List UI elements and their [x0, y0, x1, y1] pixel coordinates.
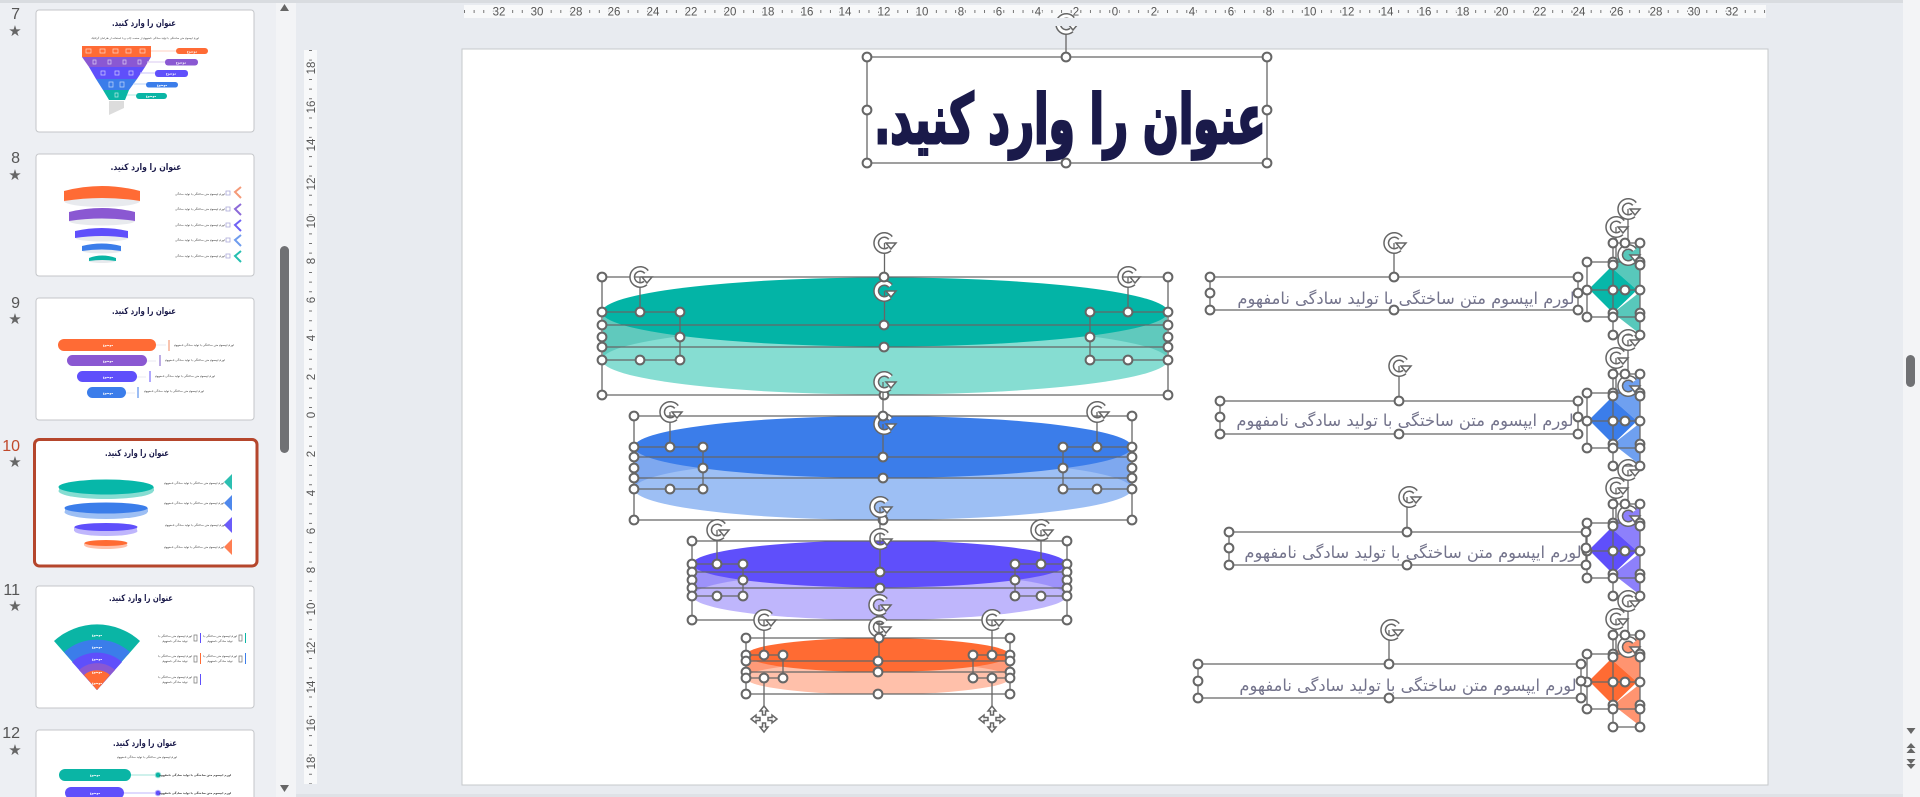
horizontal ruler: 10	[1304, 6, 1316, 18]
slide 8 thumbnail: ★	[8, 166, 22, 184]
slide 11 thumbnail: لورم ایپسوم متن ساختگی با	[158, 634, 192, 639]
slide 10 thumbnail (selected): لورم ایپسوم متن ساختگی با تولید سادگی نامفهوم	[165, 523, 225, 528]
row 2: text and diamond: لورم ایپسوم متن ساختگی با تولید سادگی نامفهوم	[1236, 411, 1574, 431]
slide 12 thumbnail: 12	[2, 725, 20, 742]
vertical ruler: 0	[306, 412, 318, 418]
row 2: text and diamond	[1216, 332, 1644, 470]
vertical ruler: 4	[306, 334, 318, 341]
slide 11 thumbnail: موضوع	[92, 645, 102, 649]
slide 11 thumbnail: لورم ایپسوم متن ساختگی با	[203, 634, 237, 639]
horizontal ruler: 14	[839, 6, 852, 18]
vertical ruler: 16	[306, 719, 318, 731]
vertical ruler: 2	[306, 451, 318, 457]
horizontal ruler: 12	[1342, 6, 1354, 18]
horizontal ruler: 2	[1151, 6, 1157, 18]
slide 10 thumbnail (selected)	[2, 438, 257, 566]
horizontal ruler: 30	[531, 6, 543, 18]
slide 10 thumbnail (selected): لورم ایپسوم متن ساختگی با تولید سادگی نامفهوم	[164, 481, 224, 486]
slide 11 thumbnail: موضوع	[92, 633, 102, 637]
slide 9 thumbnail: موضوع	[103, 359, 113, 363]
funnel layer: orange	[742, 597, 1014, 732]
slide 11 thumbnail: موضوع	[92, 657, 102, 661]
slide 10 thumbnail (selected): ★	[8, 453, 22, 471]
horizontal ruler: 26	[608, 6, 620, 18]
slide 11 thumbnail: تولید سادگی نامفهوم	[207, 639, 233, 644]
horizontal ruler: 22	[1534, 6, 1546, 18]
slide 7 thumbnail: موضوع	[146, 94, 156, 98]
slide 9 thumbnail	[8, 295, 254, 420]
horizontal ruler: 20	[1496, 6, 1508, 18]
slide 11 thumbnail: ★	[8, 597, 22, 615]
slide 11 thumbnail: تولید سادگی نامفهوم	[162, 680, 188, 685]
horizontal ruler: 28	[1650, 6, 1662, 18]
main scrollbar	[1903, 0, 1920, 797]
horizontal ruler: 18	[762, 6, 774, 18]
slide 7 thumbnail: موضوع	[166, 72, 176, 76]
row 3: text and diamond: لورم ایپسوم متن ساختگی با تولید سادگی نامفهوم	[1244, 543, 1582, 563]
horizontal ruler	[464, 5, 1766, 18]
horizontal ruler: 24	[647, 6, 660, 18]
vertical ruler: 6	[306, 297, 318, 303]
vertical ruler: 6	[306, 528, 318, 534]
vertical ruler: 12	[306, 178, 318, 190]
vertical ruler: 14	[306, 680, 318, 693]
title with selection box	[863, 16, 1271, 167]
row 1: text and diamond	[1206, 201, 1644, 339]
slide 12 thumbnail: لورم ایپسوم متن ساختگی با تولید سادگی نامفهوم	[117, 755, 177, 760]
slide 12 thumbnail: لورم ایپسوم متن ساختگی با تولید سادگی نامفهوم	[159, 791, 231, 795]
vertical ruler	[304, 50, 318, 784]
horizontal ruler: 26	[1611, 6, 1623, 18]
slide 11 thumbnail: لورم ایپسوم متن ساختگی با	[158, 675, 192, 680]
slide 9 thumbnail: لورم ایپسوم متن ساختگی با تولید سادگی نامفهوم	[155, 374, 215, 379]
top window strip	[0, 0, 1920, 3]
slide 10 thumbnail (selected): لورم ایپسوم متن ساختگی با تولید سادگی نامفهوم	[164, 545, 224, 550]
vertical ruler: 8	[306, 258, 318, 264]
slide 7 thumbnail: موضوع	[187, 50, 197, 54]
row 4: text and diamond	[1194, 593, 1644, 731]
slide canvas	[462, 49, 1768, 785]
horizontal ruler: 4	[1189, 6, 1196, 18]
slide 8 thumbnail	[8, 150, 254, 276]
slide 9 thumbnail: لورم ایپسوم متن ساختگی با تولید سادگی نامفهوم	[174, 343, 234, 348]
horizontal ruler: 22	[685, 6, 697, 18]
horizontal ruler: 8	[958, 6, 964, 18]
slide 11 thumbnail: موضوع	[92, 670, 102, 674]
slide 7 thumbnail: ★	[8, 22, 22, 40]
slide 10 thumbnail (selected): لورم ایپسوم متن ساختگی با تولید سادگی نامفهوم	[164, 501, 224, 506]
slide 8 thumbnail: 8	[11, 150, 20, 167]
slide 11 thumbnail: عنوان را وارد کنید.	[109, 594, 173, 604]
title with selection box: عنوان را وارد کنید.	[874, 80, 1266, 160]
funnel layer: blue	[630, 374, 1136, 524]
slide 9 thumbnail: لورم ایپسوم متن ساختگی با تولید سادگی نامفهوم	[165, 358, 225, 363]
slide 11 thumbnail: تولید سادگی نامفهوم	[162, 659, 188, 664]
slide 9 thumbnail: ★	[8, 310, 22, 328]
horizontal ruler: 28	[570, 6, 582, 18]
slide 10 thumbnail (selected): عنوان را وارد کنید.	[105, 449, 169, 459]
slide 8 thumbnail: لورم ایپسوم متن ساختگی با تولید سادگی	[175, 223, 225, 228]
slide 8 thumbnail: لورم ایپسوم متن ساختگی با تولید سادگی	[175, 207, 225, 212]
vertical ruler: 2	[306, 374, 318, 380]
slide 9 thumbnail: 9	[11, 295, 20, 312]
horizontal ruler: 14	[1381, 6, 1394, 18]
slide 9 thumbnail: موضوع	[103, 375, 113, 379]
slide 11 thumbnail: تولید سادگی نامفهوم	[207, 659, 233, 664]
slide 10 thumbnail (selected): 10	[2, 438, 20, 455]
horizontal ruler: 6	[996, 6, 1002, 18]
slide 12 thumbnail: لورم ایپسوم متن ساختگی با تولید سادگی نامفهوم	[159, 773, 231, 777]
slide 7 thumbnail: موضوع	[176, 60, 186, 64]
slide 12 thumbnail: موضوع	[90, 773, 100, 777]
horizontal ruler: 32	[1726, 6, 1738, 18]
slide 7 thumbnail: 7	[11, 6, 20, 23]
slide 8 thumbnail: لورم ایپسوم متن ساختگی با تولید سادگی	[175, 192, 225, 197]
vertical ruler: 4	[306, 489, 318, 496]
horizontal ruler: 6	[1228, 6, 1234, 18]
slide 12 thumbnail: موضوع	[90, 791, 100, 795]
slide 9 thumbnail: عنوان را وارد کنید.	[112, 307, 176, 317]
thumbnail panel background	[0, 0, 296, 797]
slide 8 thumbnail: عنوان را وارد کنید.	[110, 163, 182, 173]
slide 7 thumbnail	[8, 6, 254, 132]
slide 11 thumbnail: لورم ایپسوم متن ساختگی با	[158, 654, 192, 659]
slide 12 thumbnail: ★	[8, 741, 22, 759]
slide 9 thumbnail: لورم ایپسوم متن ساختگی با تولید سادگی نامفهوم	[144, 389, 204, 394]
slide 7 thumbnail: موضوع	[157, 83, 167, 87]
bottom window strip	[296, 794, 1920, 797]
horizontal ruler: 0	[1112, 6, 1118, 18]
vertical ruler: 10	[306, 603, 318, 615]
horizontal ruler: 20	[724, 6, 736, 18]
slide 7 thumbnail: عنوان را وارد کنید.	[112, 19, 176, 29]
slide 9 thumbnail: موضوع	[103, 391, 113, 395]
vertical ruler: 18	[306, 62, 318, 74]
funnel layer: purple	[688, 499, 1071, 624]
slide 8 thumbnail: لورم ایپسوم متن ساختگی با تولید سادگی	[175, 254, 225, 259]
vertical ruler: 18	[306, 757, 318, 769]
horizontal ruler: 16	[801, 6, 813, 18]
slide 11 thumbnail: تولید سادگی نامفهوم	[162, 639, 188, 644]
vertical ruler: 12	[306, 642, 318, 654]
slide 12 thumbnail: عنوان را وارد کنید.	[113, 739, 177, 749]
slide 11 thumbnail: لورم ایپسوم متن ساختگی با	[203, 654, 237, 659]
horizontal ruler: 18	[1457, 6, 1469, 18]
vertical ruler: 16	[306, 101, 318, 113]
slide 9 thumbnail: موضوع	[103, 343, 113, 347]
slide 11 thumbnail: موضوع	[92, 681, 102, 685]
slide 8 thumbnail: لورم ایپسوم متن ساختگی با تولید سادگی	[175, 238, 225, 243]
row 3: text and diamond	[1225, 462, 1644, 600]
horizontal ruler: 8	[1266, 6, 1272, 18]
horizontal ruler: 16	[1419, 6, 1431, 18]
horizontal ruler: 2	[1073, 6, 1079, 18]
slide 12 thumbnail	[2, 725, 254, 797]
horizontal ruler: 4	[1035, 6, 1042, 18]
horizontal ruler: 24	[1573, 6, 1586, 18]
row 1: text and diamond: لورم ایپسوم متن ساختگی با تولید سادگی نامفهوم	[1237, 289, 1575, 309]
slide 11 thumbnail	[3, 582, 254, 708]
thumbnail scrollbar	[276, 0, 296, 797]
horizontal ruler: 30	[1688, 6, 1700, 18]
horizontal ruler: 10	[916, 6, 928, 18]
slide 11 thumbnail: 11	[3, 582, 20, 599]
horizontal ruler: 32	[493, 6, 505, 18]
horizontal ruler: 12	[878, 6, 890, 18]
vertical ruler: 8	[306, 567, 318, 573]
slide 7 thumbnail: لورم ایپسوم متن ساختگی با تولید سادگی نامفهوم از صنعت چاپ و با استفاده از طراحان گرافیک	[91, 36, 199, 41]
vertical ruler: 10	[306, 216, 318, 228]
funnel layer: teal	[598, 235, 1172, 399]
vertical ruler: 14	[306, 138, 318, 151]
row 4: text and diamond: لورم ایپسوم متن ساختگی با تولید سادگی نامفهوم	[1239, 676, 1577, 696]
